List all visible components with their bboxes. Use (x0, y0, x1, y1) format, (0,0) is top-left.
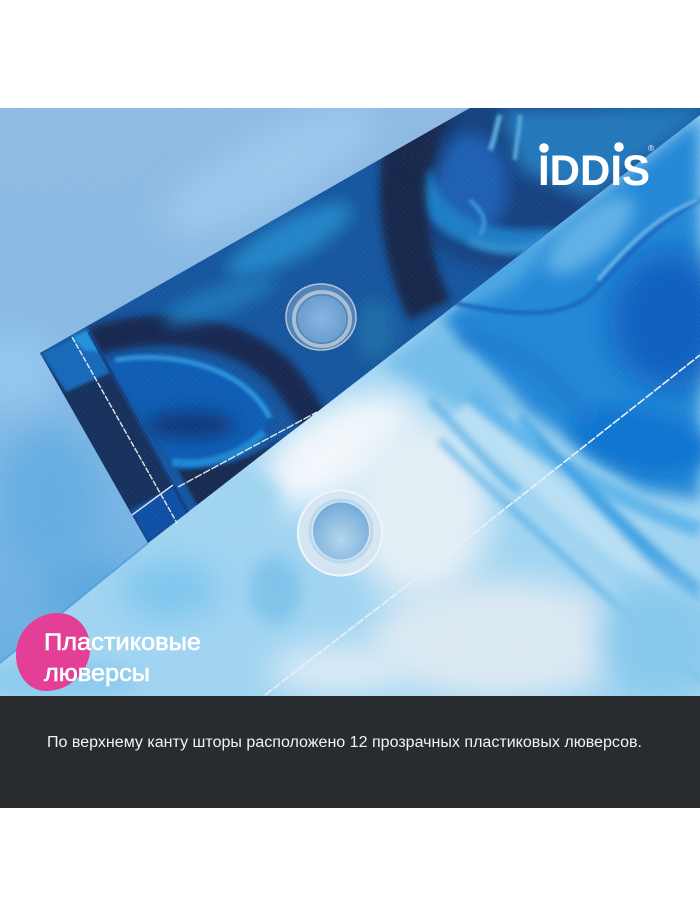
photo: shower curtain close-up (0, 83, 700, 700)
heading: plastic grommets (44, 629, 201, 687)
diagonal marble stripes (430, 395, 700, 680)
flap hem fold (40, 330, 190, 543)
heading: plastic grommets: Пластиковые (44, 629, 201, 656)
infographic canvas (0, 108, 700, 808)
icon: upper transparent grommet (286, 284, 356, 350)
fold shadow under flap (0, 543, 148, 663)
lower left tones (120, 560, 220, 620)
pink accent blob (16, 613, 90, 691)
white centre and pale bottom (250, 374, 430, 526)
caption text: По верхнему канту шторы расположено 12 прозрачных пластиковых люверсов. (47, 734, 642, 751)
flap stitching (72, 337, 317, 523)
logo: IDDIS: ® (648, 143, 655, 153)
logo: IDDIS: IDDIS (538, 147, 650, 195)
central blue tones (223, 196, 357, 280)
hem stitch on lower panel (265, 355, 700, 695)
lower blue blob (108, 358, 269, 462)
right swirl (399, 108, 648, 274)
icon: lower transparent grommet (297, 490, 383, 576)
upper saturated blue area (437, 115, 700, 500)
fabric: lower curtain panel with marble swirls (0, 108, 700, 700)
dark printed flap (40, 108, 700, 543)
dark navy bands (403, 130, 430, 310)
heading: plastic grommets: люверсы (44, 660, 150, 687)
dark caption panel (0, 696, 700, 808)
fabric: left light blue panel (0, 83, 700, 696)
